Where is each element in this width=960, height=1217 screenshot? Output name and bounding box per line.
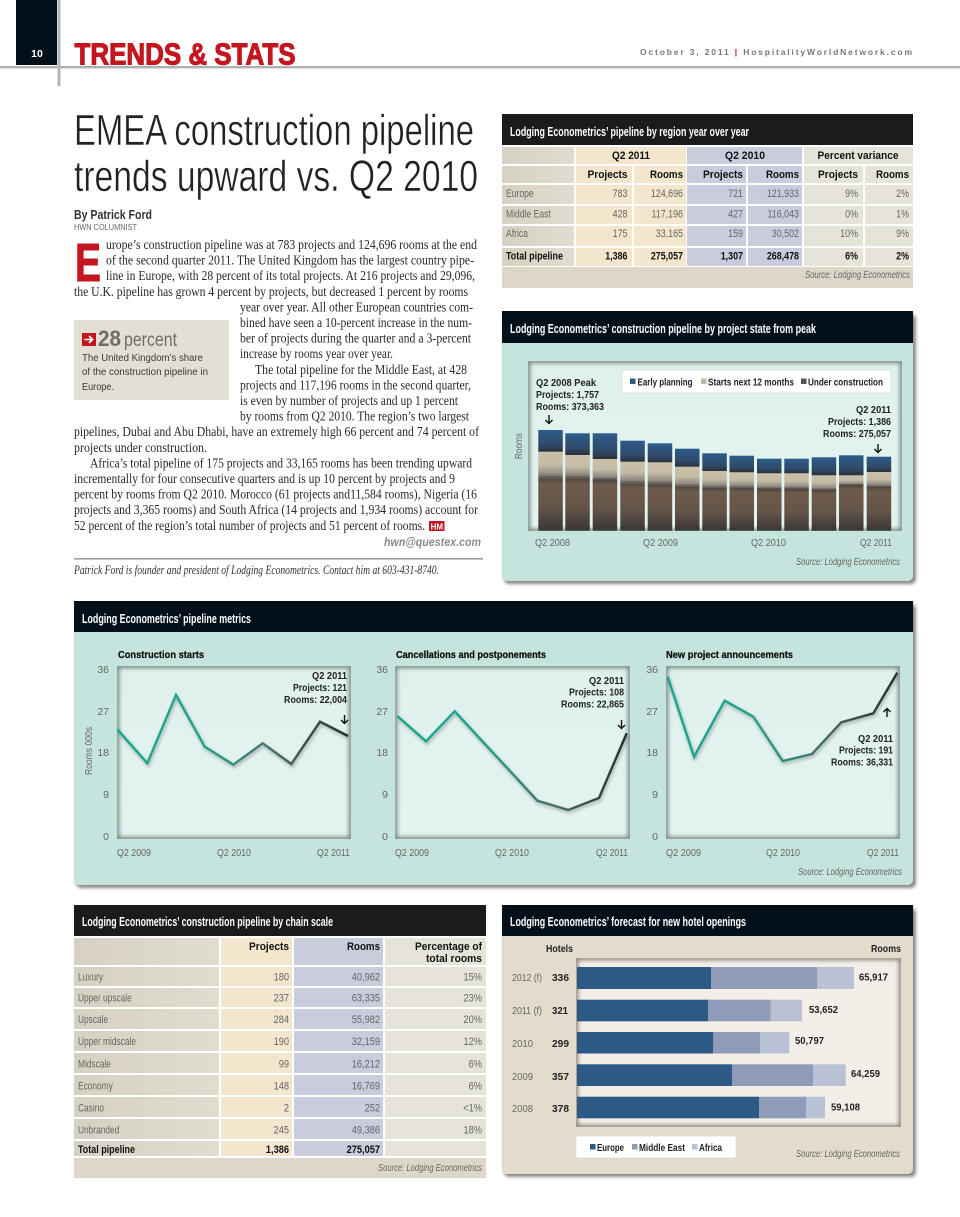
chart: construction starts: 0 — [103, 831, 109, 843]
hotel counts — [552, 972, 569, 1115]
hotel counts: 321 — [552, 1005, 568, 1017]
panel heading: Lodging Econometrics’ construction pipeline by project state from peak — [510, 322, 816, 336]
column: Q2 2010 rooms: 30,502 — [772, 228, 799, 240]
room totals: 64,259 — [851, 1068, 880, 1080]
column: Q2 2011 rooms — [651, 188, 683, 263]
article body text: bined have seen a 10-percent increase in the num- — [240, 315, 472, 330]
column: projects: 245 — [274, 1125, 289, 1137]
column: Q2 2011 rooms: 124,696 — [651, 188, 683, 200]
annotation: Q2 2011 — [823, 404, 891, 452]
chart: new project announcements — [646, 649, 900, 859]
bar: 2009 — [577, 1064, 846, 1086]
panel heading — [502, 905, 913, 936]
year labels: 2011 (f) — [512, 1005, 542, 1017]
chart: cancellations and postponements: Q2 2011 — [589, 675, 624, 687]
column headers: Projects — [818, 169, 858, 181]
chart: construction starts: 18 — [97, 747, 109, 759]
page header — [0, 0, 960, 86]
byline: By Patrick Ford — [74, 208, 152, 222]
column: projects: 99 — [279, 1059, 289, 1071]
column: rooms: 252 — [365, 1103, 380, 1115]
column: percentage of total rooms: 18% — [464, 1125, 482, 1137]
column: Q2 2011 projects: 783 — [613, 188, 628, 200]
callout: 28 percent: The United Kingdom’s share — [82, 353, 203, 364]
column: rooms — [347, 972, 380, 1156]
panel: construction pipeline by project state — [502, 311, 916, 584]
column: projects: 148 — [274, 1081, 289, 1093]
column: projects: 237 — [274, 993, 289, 1005]
page number tab — [16, 0, 57, 65]
year labels: 2010 — [512, 1038, 533, 1050]
chart: cancellations and postponements: Projects: 108 — [569, 686, 624, 698]
column: rooms: 55,982 — [352, 1014, 380, 1026]
x axis labels: Q2 2009 — [643, 537, 678, 549]
bar: 2008 — [577, 1097, 825, 1118]
article body text: projects and 3,365 rooms) and South Africa (14 projects and 1,934 rooms) account for — [74, 502, 479, 517]
panel heading: Lodging Econometrics’ pipeline by region year over year — [510, 125, 749, 139]
author email: hwn@questex.com — [384, 535, 481, 549]
chart: new project announcements: Projects: 191 — [839, 744, 893, 756]
column headers: Percentage of — [415, 941, 482, 953]
panel: forecast for new hotel openings — [502, 905, 916, 1177]
bar: 2012 (f) — [577, 967, 854, 989]
page number tab: 10 — [31, 48, 43, 60]
column: variance rooms: 1% — [896, 209, 909, 221]
chart: cancellations and postponements: Cancellations and postponements — [396, 649, 546, 661]
byline: HWN COLUMNIST — [74, 223, 137, 232]
year labels: 2008 — [512, 1103, 533, 1115]
annotation: peak — [536, 377, 604, 424]
year labels: 2009 — [512, 1071, 533, 1083]
column: Q2 2010 projects: 1,307 — [721, 251, 743, 263]
column: rooms: 16,769 — [352, 1081, 380, 1093]
column headers: Rooms — [650, 169, 683, 181]
legend: Under construction — [808, 376, 883, 388]
article body text: percent by rooms from Q2 2010. Morocco (61 projects and11,584 rooms), Nigeria (16 — [74, 487, 477, 502]
column titles: Hotels — [546, 943, 573, 955]
column: Q2 2010 rooms: 268,478 — [767, 251, 799, 263]
column: Q2 2010 rooms: 116,043 — [767, 209, 799, 221]
article body text: 52 percent of the region’s total number of projects and 51 percent of rooms. — [74, 518, 425, 533]
hotel counts: 299 — [552, 1038, 569, 1050]
chart: new project announcements: Q2 2010 — [766, 847, 800, 859]
article body text: of the second quarter 2011. The United Kingdom has the largest country pipe- — [106, 253, 474, 268]
column headers: Percent variance — [818, 150, 898, 162]
chart: cancellations and postponements: 9 — [382, 789, 388, 801]
panel heading — [502, 311, 913, 343]
column: rooms: 40,962 — [352, 972, 380, 984]
x axis labels — [535, 537, 892, 549]
chart: cancellations and postponements: 27 — [376, 706, 388, 718]
panel: pipeline by region year over year — [502, 114, 913, 288]
legend — [576, 1136, 736, 1158]
legend: Africa — [699, 1142, 722, 1154]
chart: construction starts: Q2 2010 — [217, 847, 251, 859]
icon: HM end mark: HM — [431, 522, 443, 531]
column: Q2 2010 rooms — [767, 188, 799, 263]
x axis labels: Q2 2011 — [860, 537, 892, 549]
chart: construction starts: Construction starts — [118, 649, 204, 661]
row labels: Casino — [78, 1102, 104, 1115]
column: Q2 2010 projects — [721, 188, 743, 263]
year labels — [512, 972, 542, 1115]
column headers: Projects — [249, 941, 289, 953]
row labels: Europe — [506, 188, 534, 200]
column: Q2 2011 projects — [605, 188, 628, 263]
column titles: Rooms — [871, 943, 901, 955]
column: projects: 180 — [274, 972, 289, 984]
chart: cancellations and postponements: 36 — [376, 664, 388, 676]
article body text: projects and 117,196 rooms in the second quarter, — [240, 377, 471, 392]
date and website: October 3, 2011 | HospitalityWorldNetwork.com — [640, 47, 912, 57]
column headers: Rooms — [766, 169, 799, 181]
row labels: Total pipeline — [78, 1144, 136, 1156]
legend: Starts next 12 months — [708, 376, 794, 388]
column: rooms: 63,335 — [352, 993, 380, 1005]
legend: Europe — [597, 1142, 624, 1154]
column: variance projects: 6% — [845, 251, 858, 263]
row labels: Unbranded — [78, 1124, 119, 1137]
row labels: Total pipeline — [506, 251, 563, 263]
column headers: Projects — [588, 169, 628, 181]
column: Q2 2011 projects: 1,386 — [605, 251, 628, 263]
column: Q2 2011 rooms: 275,057 — [651, 251, 683, 263]
column headers: total rooms — [426, 953, 482, 965]
chart: cancellations and postponements: Q2 2009 — [395, 847, 429, 859]
chart: construction starts: Q2 2009 — [117, 847, 151, 859]
annotation: Q2 2011: Rooms: 275,057 — [823, 428, 891, 440]
column: Q2 2010 projects: 159 — [728, 228, 743, 240]
chart: cancellations and postponements: Q2 2010 — [495, 847, 529, 859]
author bio: Patrick Ford is founder and president of Lodging Econometrics. Contact him at 603-431-8740. — [73, 563, 439, 577]
chart: construction starts: 27 — [97, 706, 109, 718]
column: rooms: 49,386 — [352, 1125, 380, 1137]
stacked bar chart — [528, 361, 902, 531]
article body text: Africa’s total pipeline of 175 projects and 33,165 rooms has been trending upward — [90, 455, 472, 470]
annotation: peak: Projects: 1,757 — [536, 389, 599, 401]
bar: 2010 — [577, 1032, 789, 1054]
byline — [74, 208, 152, 232]
column: projects: 284 — [274, 1014, 289, 1026]
panel heading — [74, 905, 486, 936]
column: percentage of total rooms: 23% — [464, 993, 482, 1005]
chart: construction starts: Q2 2011 — [312, 670, 347, 682]
row labels: Upper upscale — [78, 992, 132, 1005]
chart: cancellations and postponements: Q2 2011 — [596, 847, 628, 859]
legend: Early planning — [638, 376, 692, 388]
column: Q2 2010 projects: 427 — [728, 209, 743, 221]
bars: under construction — [538, 478, 891, 531]
panel heading — [502, 114, 913, 145]
column: rooms: 16,212 — [352, 1059, 380, 1071]
column headers: Rooms — [347, 941, 380, 953]
source note: Source: Lodging Econometrics — [805, 269, 911, 281]
chart: construction starts — [97, 649, 351, 859]
panel heading: Lodging Econometrics’ pipeline metrics — [82, 612, 251, 626]
chart: construction starts: Projects: 121 — [293, 682, 347, 694]
year labels: 2012 (f) — [512, 972, 542, 984]
annotation: peak: Rooms: 373,363 — [536, 401, 604, 413]
legend: Middle East — [639, 1142, 685, 1154]
chart: construction starts: 36 — [97, 664, 109, 676]
panel: pipeline metrics — [74, 601, 916, 888]
chart: construction starts: Q2 2011 — [317, 847, 350, 859]
annotation: Q2 2011: Projects: 1,386 — [828, 416, 891, 428]
chart: new project announcements: Rooms: 36,331 — [831, 756, 893, 768]
source note: Source: Lodging Econometrics — [796, 556, 901, 568]
callout: 28 percent — [74, 320, 229, 400]
article body text: year over year. All other European countries com- — [240, 300, 473, 314]
column: percentage of total rooms: <1% — [463, 1103, 482, 1115]
panel heading: Lodging Econometrics’ construction pipeline by chain scale — [82, 915, 333, 929]
arrow — [874, 444, 882, 452]
column: projects: 190 — [274, 1036, 289, 1048]
callout: 28 percent: of the construction pipeline in — [82, 367, 208, 378]
legend — [622, 370, 891, 393]
x axis labels: Q2 2010 — [751, 537, 786, 549]
callout: 28 percent: 28 — [98, 326, 121, 351]
column titles — [546, 943, 901, 955]
column: variance rooms: 9% — [896, 228, 909, 240]
column headers: Q2 2011 — [612, 150, 650, 162]
column: projects — [266, 972, 289, 1156]
column headers — [588, 150, 909, 181]
row labels: Luxury — [78, 971, 103, 984]
column: variance projects: 10% — [840, 228, 858, 240]
column: variance projects — [840, 188, 858, 263]
horizontal stacked bar chart — [576, 958, 901, 1127]
chart: new project announcements: New project announcements — [666, 649, 793, 661]
row labels — [78, 971, 136, 1156]
column: Q2 2011 rooms: 117,196 — [651, 209, 683, 221]
column: variance projects: 9% — [845, 188, 858, 200]
source note: Source: Lodging Econometrics — [378, 1162, 483, 1174]
icon: red arrow — [82, 333, 96, 346]
column: rooms: 32,159 — [352, 1036, 380, 1048]
row labels: Middle East — [506, 209, 551, 221]
y axis label: Rooms — [513, 433, 525, 459]
column: percentage of total rooms: 6% — [469, 1059, 482, 1071]
column: projects: 2 — [284, 1103, 289, 1115]
room totals — [795, 972, 888, 1114]
chart: new project announcements: 18 — [646, 747, 658, 759]
chart: cancellations and postponements — [376, 649, 630, 859]
x axis labels: Q2 2008 — [535, 537, 570, 549]
column: variance rooms: 2% — [896, 251, 909, 263]
column: percentage of total rooms: 20% — [464, 1014, 482, 1026]
article body text — [74, 237, 480, 533]
column headers: Rooms — [876, 169, 909, 181]
column: percentage of total rooms: 12% — [464, 1036, 482, 1048]
column: variance rooms: 2% — [896, 188, 909, 200]
bar: 2011 (f) — [577, 1000, 802, 1021]
column headers: Projects — [703, 169, 743, 181]
y axis title: Rooms 000s — [83, 727, 95, 775]
column: variance projects: 0% — [845, 209, 858, 221]
panel heading: Lodging Econometrics’ forecast for new hotel openings — [510, 915, 746, 929]
hotel counts: 357 — [552, 1071, 569, 1083]
row labels: Upscale — [78, 1014, 108, 1026]
column headers — [249, 941, 482, 965]
column: Q2 2010 projects: 721 — [728, 188, 743, 200]
column: Q2 2011 rooms: 33,165 — [656, 228, 683, 240]
article body text: by rooms from Q2 2010. The region’s two largest — [240, 409, 469, 424]
bars: starts next 12 months — [538, 452, 891, 490]
section title: TRENDS & STATS — [74, 36, 296, 72]
chart: new project announcements: 36 — [646, 664, 658, 676]
row labels — [506, 188, 563, 263]
chart: construction starts: Rooms: 22,004 — [284, 694, 347, 706]
panel heading — [74, 601, 913, 632]
chart: new project announcements: Q2 2011 — [867, 847, 899, 859]
article body text: The total pipeline for the Middle East, at 428 — [255, 362, 467, 377]
column: Q2 2010 rooms: 121,933 — [767, 188, 799, 200]
column headers: Q2 2010 — [725, 150, 765, 162]
room totals: 59,108 — [831, 1102, 860, 1114]
callout: 28 percent: Europe. — [82, 382, 114, 393]
column: rooms: 275,057 — [347, 1144, 380, 1156]
hotel counts: 378 — [552, 1103, 569, 1115]
article body text: line in Europe, with 28 percent of its total projects. At 216 projects and 29,096, — [106, 268, 475, 283]
column: percentage of total rooms: 6% — [469, 1081, 482, 1093]
article body text: incrementally for four consecutive quarters and is up 10 percent by projects and 9 — [74, 471, 455, 486]
bars: early planning — [538, 430, 891, 475]
room totals: 50,797 — [795, 1035, 824, 1047]
chart: new project announcements: Q2 2009 — [666, 847, 701, 859]
chart: cancellations and postponements: 18 — [376, 747, 388, 759]
chart: new project announcements: 27 — [646, 706, 658, 718]
chart: cancellations and postponements: Rooms: 22,865 — [561, 698, 624, 710]
row labels: Africa — [506, 228, 528, 240]
row labels: Upper midscale — [78, 1036, 136, 1048]
chart: construction starts: 9 — [103, 789, 109, 801]
headline — [74, 106, 478, 201]
article body text: the U.K. pipeline has grown 4 percent by projects, but decreased 1 percent by rooms — [74, 284, 468, 299]
callout: 28 percent: percent — [124, 330, 178, 351]
panel: pipeline by chain scale — [74, 905, 486, 1178]
arrow — [546, 415, 552, 424]
column: percentage of total rooms — [463, 972, 482, 1137]
column: projects: 1,386 — [266, 1144, 289, 1156]
column: percentage of total rooms: 15% — [464, 972, 482, 984]
chart: new project announcements: Q2 2011 — [858, 733, 893, 745]
article body text: pipelines, Dubai and Abu Dhabi, have an extremely high 66 percent and 74 percent of — [74, 424, 480, 439]
row labels: Midscale — [78, 1058, 111, 1071]
headline: trends upward vs. Q2 2010 — [74, 152, 478, 201]
column: variance rooms — [896, 188, 909, 263]
column: Q2 2011 projects: 428 — [613, 209, 628, 221]
row labels: Economy — [78, 1080, 113, 1093]
chart: cancellations and postponements: 0 — [382, 831, 388, 843]
source note: Source: Lodging Econometrics — [796, 1148, 901, 1160]
annotation: peak: Q2 2008 Peak — [536, 377, 596, 389]
chart: new project announcements: 9 — [652, 789, 658, 801]
hotel counts: 336 — [552, 972, 569, 984]
article body text: projects under construction. — [74, 440, 207, 455]
headline: EMEA construction pipeline — [74, 106, 474, 155]
article body text: increase by rooms year over year. — [240, 346, 393, 361]
drop cap: E — [75, 233, 101, 293]
annotation: Q2 2011: Q2 2011 — [856, 404, 891, 416]
room totals: 65,917 — [859, 972, 888, 984]
source note: Source: Lodging Econometrics — [798, 866, 903, 878]
article body text: urope’s construction pipeline was at 783 projects and 124,696 rooms at the end — [106, 237, 477, 252]
column: Q2 2011 projects: 175 — [613, 228, 628, 240]
article body text: ber of projects during the quarter and a 3-percent — [240, 331, 471, 346]
article body text: is even by number of projects and up 1 percent — [240, 393, 458, 408]
chart: new project announcements: 0 — [652, 831, 658, 843]
room totals: 53,652 — [809, 1004, 838, 1016]
